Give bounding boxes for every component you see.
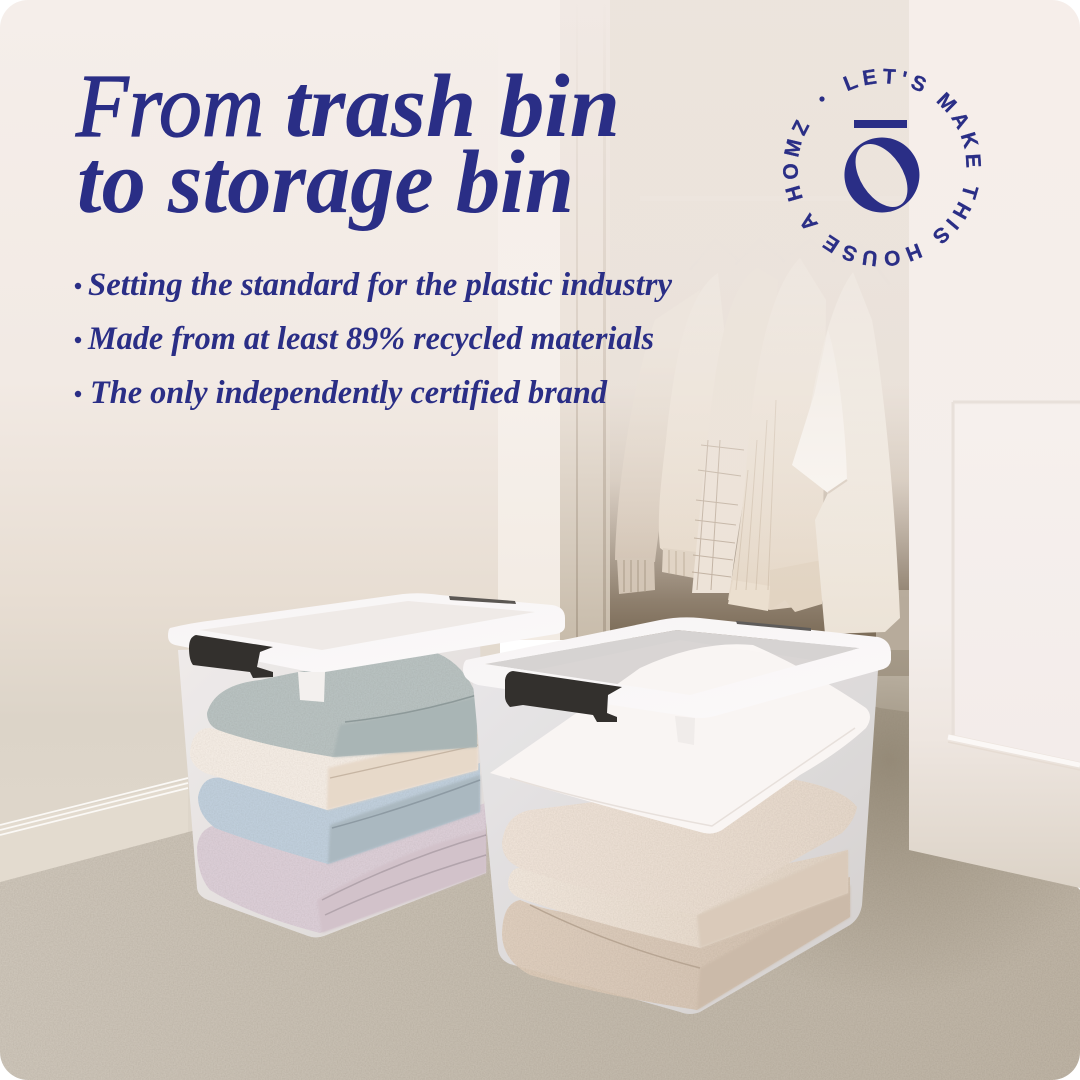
black handle: [505, 671, 622, 722]
hangers: [690, 240, 890, 285]
logo mark: [844, 120, 919, 212]
left storage bin: [168, 593, 565, 938]
cream blanket: [190, 727, 478, 810]
logo badge: [782, 68, 982, 266]
closet fade overlay: [610, 196, 909, 554]
wall corner section: [498, 0, 561, 640]
grey-green blanket: [207, 653, 477, 757]
clothes rail: [640, 196, 909, 201]
white tee: [792, 330, 900, 634]
room wall: [0, 0, 500, 900]
title: to storage bin: [77, 133, 574, 232]
right storage bin: [463, 617, 891, 1014]
bullet: certified brand: The only independently certified brand: [90, 375, 607, 411]
circular slogan: LET'S MAKE THIS HOUSE A HOMZ: [782, 68, 982, 266]
closet side baseboard: [876, 590, 909, 712]
lilac blanket: [197, 803, 486, 933]
carpet floor: [0, 632, 1080, 1080]
lid top panel: [200, 601, 535, 650]
black handle: [189, 635, 273, 678]
closet door: [909, 0, 1080, 888]
title: From: [75, 57, 264, 156]
hanging clothes: [615, 330, 900, 634]
top blanket: [502, 780, 857, 883]
lid clip back: [449, 596, 516, 604]
sweater: [615, 482, 661, 594]
bin body: [178, 640, 486, 938]
bin lid: [463, 617, 891, 718]
lid clip back: [736, 621, 811, 631]
baseboard: [0, 778, 188, 882]
frosted overlay: [207, 654, 486, 916]
plaid shirt: [692, 421, 750, 593]
lid tab: [298, 672, 325, 702]
closet interior: [610, 261, 909, 640]
title: [75, 57, 620, 232]
closet door frame: [560, 0, 611, 640]
blue blanket: [198, 763, 480, 864]
lid window interior: [488, 630, 859, 684]
bin lid: [168, 593, 565, 672]
middle blanket: [508, 850, 848, 948]
bottom blanket: [502, 877, 850, 1010]
white pillow: [490, 644, 870, 834]
bin body: [473, 640, 878, 1014]
bullet: recycled materials: Made from at least 89% recycled materials: [87, 321, 654, 357]
door panel: [955, 712, 1080, 762]
lid tab: [675, 716, 695, 745]
title: trash bin: [285, 57, 620, 156]
knit top: [659, 412, 710, 578]
bullet: plastic industry: Setting the standard for the plastic industry: [88, 267, 672, 303]
striped shirt: [728, 400, 824, 612]
frosted overlay: [530, 904, 700, 968]
